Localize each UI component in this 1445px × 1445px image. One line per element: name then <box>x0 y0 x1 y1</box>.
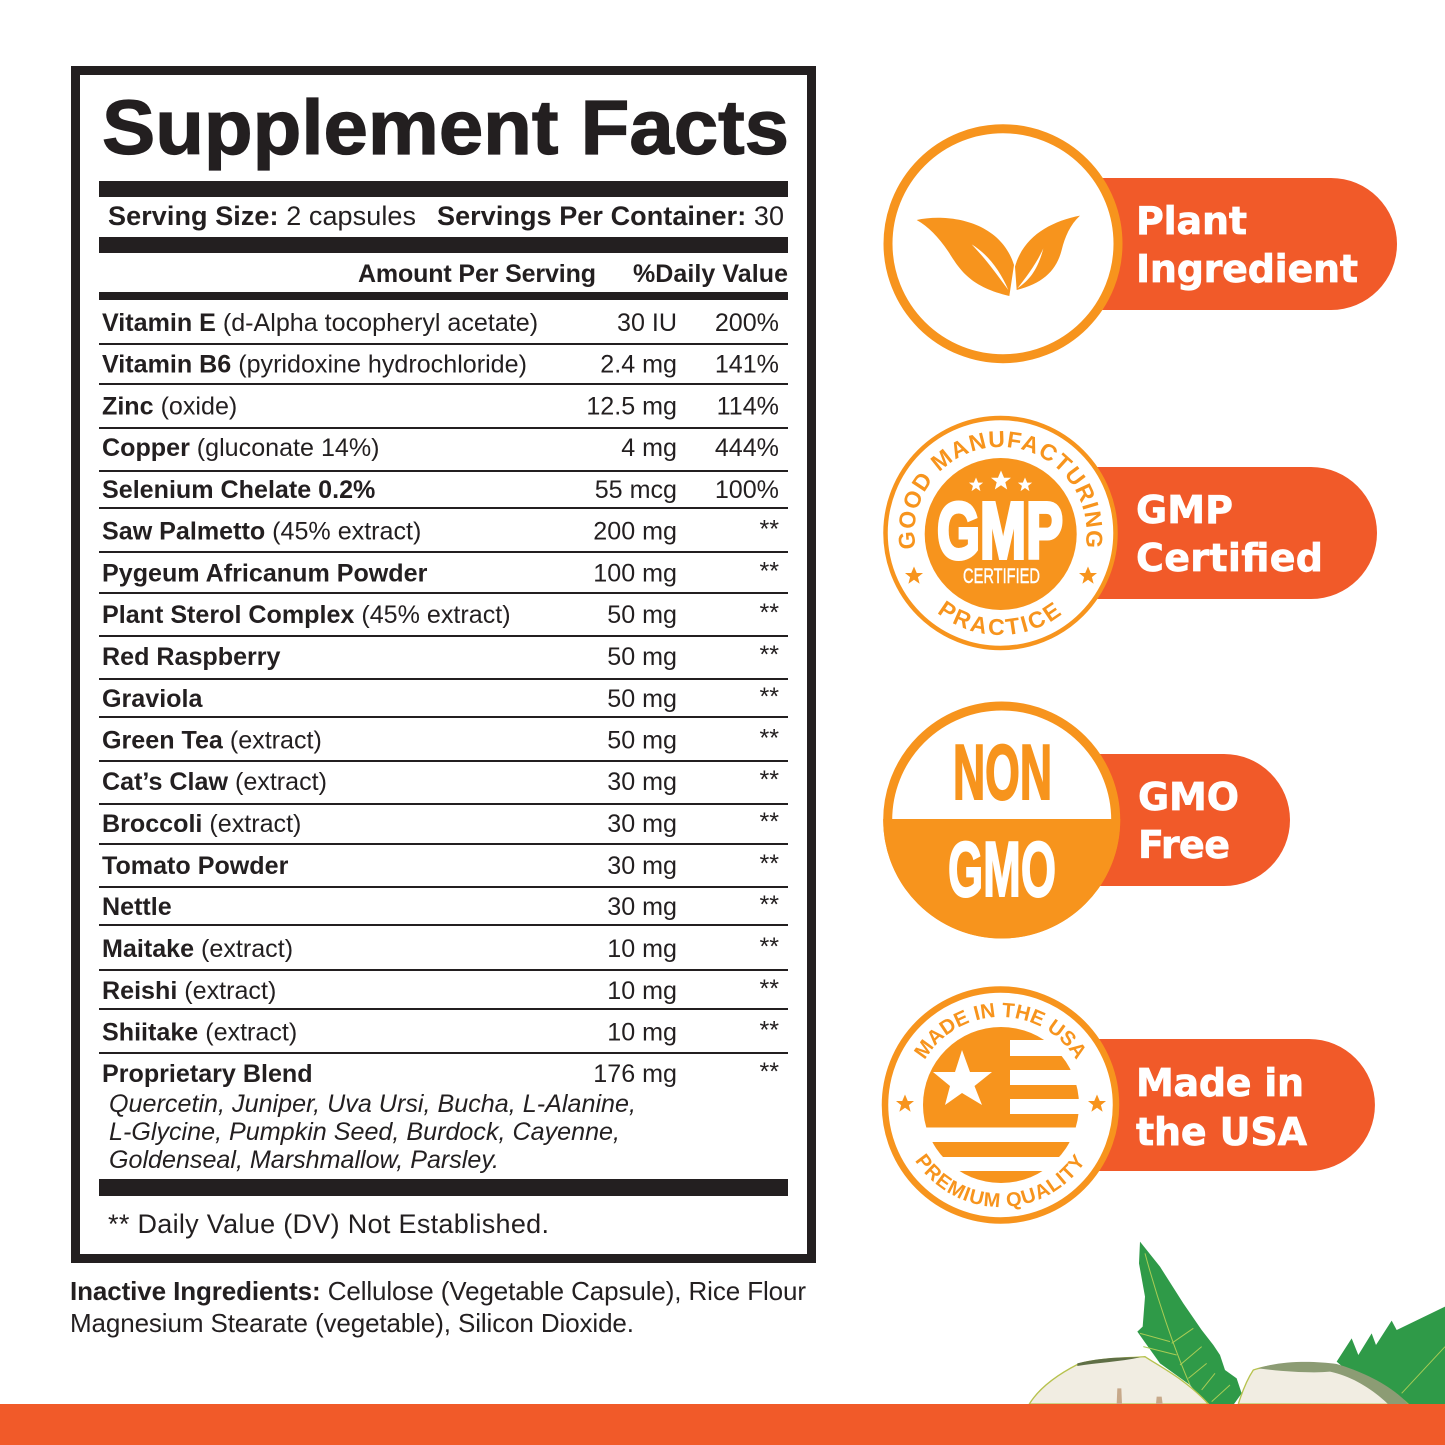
ingredient rows: 141% <box>715 351 779 379</box>
ingredient rows: 50 mg <box>607 727 677 755</box>
ingredient rows: 100% <box>715 476 779 504</box>
column headers: %Daily Value <box>633 260 788 288</box>
ingredient rows: ** <box>759 808 779 836</box>
ingredient rows: 114% <box>717 392 779 420</box>
proprietary blend ingredients: Goldenseal, Marshmallow, Parsley. <box>109 1146 499 1174</box>
ingredient rows: 50 mg <box>607 601 677 629</box>
ingredient rows: 176 mg <box>593 1060 677 1088</box>
botanical illustration: leaves and fruit <box>1029 1242 1445 1405</box>
ingredient rows: Broccoli (extract) <box>102 810 301 838</box>
right leaf <box>1337 1307 1445 1405</box>
ingredient rows: ** <box>759 975 779 1003</box>
proprietary blend ingredients: L-Glycine, Pumpkin Seed, Burdock, Cayenne, <box>109 1118 620 1146</box>
ingredient rows: 30 IU <box>617 309 677 337</box>
ingredient rows: Red Raspberry <box>102 643 281 671</box>
ingredient rows: ** <box>759 725 779 753</box>
badge: made in the USA <box>882 986 1375 1224</box>
ingredient rows: 200 mg <box>593 518 677 546</box>
ingredient rows: Zinc (oxide) <box>102 392 237 420</box>
ingredient rows: ** <box>759 933 779 961</box>
serving information <box>108 201 784 231</box>
left fruit slice <box>1029 1357 1208 1404</box>
ingredient rows: Shiitake (extract) <box>102 1019 297 1047</box>
ingredient rows: ** <box>759 558 779 586</box>
ingredient rows: 50 mg <box>607 643 677 671</box>
title: Supplement Facts <box>102 85 789 171</box>
ingredient rows: Copper (gluconate 14%) <box>102 434 380 462</box>
ingredient rows: 2.4 mg <box>600 351 677 379</box>
GMP lettering: GMP <box>937 486 1063 575</box>
ingredient rows: ** <box>759 683 779 711</box>
ingredient rows: Pygeum Africanum Powder <box>102 560 428 588</box>
ingredient rows: 30 mg <box>607 852 677 880</box>
ingredient rows: ** <box>759 1017 779 1045</box>
badge: non-GMO: NON <box>953 728 1052 816</box>
badge: non-GMO: GMO <box>948 825 1056 913</box>
ingredient rows: Saw Palmetto (45% extract) <box>102 518 421 546</box>
badge: GMP certified: GOOD MANUFACTURING <box>898 431 1102 548</box>
icon: leaves <box>917 216 1080 296</box>
badge: GMP certified: PRACTICE <box>938 600 1062 636</box>
badge: GMP certified: Certified <box>1136 536 1323 580</box>
icon: flag circle <box>920 1027 1082 1183</box>
ingredient rows: Nettle <box>102 893 172 921</box>
badge: plant ingredient <box>888 129 1397 359</box>
ingredient rows: ** <box>759 641 779 669</box>
ingredient rows: 10 mg <box>607 977 677 1005</box>
ingredient rows: Selenium Chelate 0.2% <box>102 476 375 504</box>
ingredient rows: Cat’s Claw (extract) <box>102 768 327 796</box>
ingredient rows: 10 mg <box>607 935 677 963</box>
stars <box>969 470 1032 491</box>
ingredient rows: Plant Sterol Complex (45% extract) <box>102 601 511 629</box>
ingredient rows: ** <box>759 891 779 919</box>
ingredient rows: Graviola <box>102 685 203 713</box>
badge: made in the USA: MADE IN THE USA <box>914 1002 1085 1060</box>
bottom orange band <box>0 1404 1445 1445</box>
daily value footnote: ** Daily Value (DV) Not Established. <box>108 1209 549 1239</box>
badge: made in the USA: the USA <box>1136 1110 1308 1154</box>
ingredient rows: Green Tea (extract) <box>102 727 322 755</box>
ingredient rows: ** <box>759 850 779 878</box>
column headers: Amount Per Serving <box>358 260 596 288</box>
ingredient rows <box>102 309 779 1088</box>
ingredient rows: Vitamin B6 (pyridoxine hydrochloride) <box>102 351 527 379</box>
badge: GMP certified: GMP <box>1136 488 1233 532</box>
inactive ingredients: Magnesium Stearate (vegetable), Silicon Dioxide. <box>70 1308 634 1338</box>
proprietary blend ingredients <box>109 1090 636 1174</box>
serving information: Servings Per Container: 30 <box>437 201 784 231</box>
inactive ingredients <box>70 1276 806 1338</box>
serving information: Serving Size: 2 capsules <box>108 201 416 231</box>
ingredient rows: ** <box>759 599 779 627</box>
ingredient rows: 200% <box>715 309 779 337</box>
inactive ingredients: Inactive Ingredients: Cellulose (Vegetable Capsule), Rice Flour <box>70 1276 806 1306</box>
ingredient rows: 30 mg <box>607 893 677 921</box>
ingredient rows: Reishi (extract) <box>102 977 276 1005</box>
ingredient rows: 12.5 mg <box>586 392 677 420</box>
stars <box>896 1094 1106 1112</box>
ingredient rows: 4 mg <box>621 434 677 462</box>
ingredient rows: Maitake (extract) <box>102 935 293 963</box>
badge: plant ingredient: Plant <box>1136 199 1247 243</box>
row divider lines <box>99 343 788 1054</box>
panel: supplement facts label <box>76 70 812 1258</box>
ingredient rows: 444% <box>715 434 779 462</box>
ingredient rows: 55 mcg <box>595 476 677 504</box>
column headers <box>358 260 788 288</box>
ingredient rows: ** <box>759 516 779 544</box>
ingredient rows: Proprietary Blend <box>102 1060 313 1088</box>
ingredient rows: 50 mg <box>607 685 677 713</box>
ingredient rows: Vitamin E (d-Alpha tocopheryl acetate) <box>102 309 538 337</box>
ingredient rows: 30 mg <box>607 810 677 838</box>
ingredient rows: 30 mg <box>607 768 677 796</box>
ingredient rows: 100 mg <box>593 560 677 588</box>
badge: GMP certified: CERTIFIED <box>963 565 1040 588</box>
badge: non-GMO: GMO <box>1138 775 1239 819</box>
badge: non-GMO: Free <box>1138 823 1230 867</box>
proprietary blend ingredients: Quercetin, Juniper, Uva Ursi, Bucha, L-Alanine, <box>109 1090 636 1118</box>
badge: plant ingredient: Ingredient <box>1136 247 1358 291</box>
ingredient rows: ** <box>759 766 779 794</box>
right fruit slice <box>1238 1362 1408 1404</box>
ingredient rows: Tomato Powder <box>102 852 289 880</box>
ingredient rows: 10 mg <box>607 1019 677 1047</box>
ingredient rows: ** <box>759 1058 779 1086</box>
badge: GMP certified <box>883 416 1377 650</box>
left leaf <box>1137 1242 1242 1405</box>
thick divider bars <box>99 181 788 1196</box>
badge: non-GMO <box>883 706 1290 938</box>
badge: made in the USA: Made in <box>1136 1061 1304 1105</box>
badge: made in the USA: PREMIUM QUALITY <box>916 1153 1083 1210</box>
